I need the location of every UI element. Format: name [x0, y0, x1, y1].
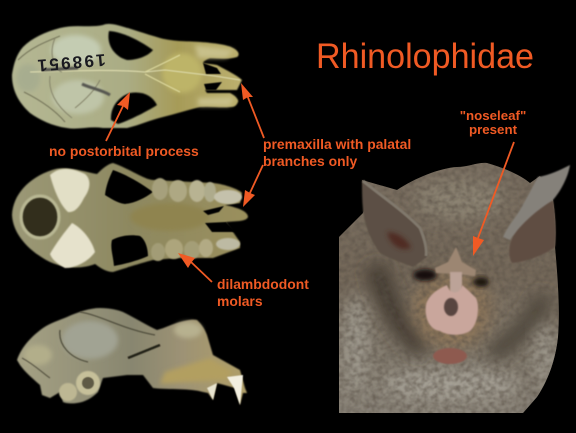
- label: noseleaf present: present: [469, 122, 518, 137]
- eye socket upper: [108, 31, 153, 60]
- arrow: to ventral premaxilla: [243, 165, 263, 207]
- eye shadows: [413, 269, 437, 281]
- rostrum: [160, 358, 234, 384]
- right ear: [509, 200, 556, 263]
- left ear: [362, 180, 428, 267]
- palate: [130, 203, 210, 231]
- lower teeth: [151, 238, 240, 261]
- premolar: [207, 383, 217, 400]
- upper teeth: [152, 178, 242, 204]
- dark ink marks: [42, 68, 110, 95]
- dark collar left: [375, 265, 425, 350]
- suture lines: [18, 36, 240, 122]
- arrow: to postorbital: [106, 92, 130, 141]
- skull: dorsal view: [12, 24, 242, 129]
- nasal gap: [203, 206, 236, 232]
- dark slit: [128, 345, 160, 358]
- forehead: [415, 180, 505, 220]
- specimen number: 198951: [37, 50, 106, 75]
- skull: ventral view: [12, 163, 248, 272]
- label: premaxilla: premaxilla with palatal: [263, 136, 411, 152]
- photo: bat face: [335, 160, 575, 415]
- label: noseleaf present: "noseleaf": [460, 108, 526, 123]
- title: Rhinolophidae: [316, 37, 534, 76]
- arrow: to noseleaf: [473, 142, 514, 256]
- noseleaf upper: [435, 247, 476, 276]
- tympanic bulla lower: [50, 223, 95, 268]
- arrow: to molars: [178, 253, 212, 282]
- orbit gap lower: [111, 235, 148, 266]
- dark collar right: [490, 295, 545, 355]
- label: no postorbital process: no postorbital process: [49, 143, 199, 159]
- eye socket lower: [111, 92, 157, 124]
- label: dilambdodont molars: dilambdodont: [217, 276, 309, 292]
- pale chest: [380, 369, 520, 401]
- fur texture: [339, 163, 558, 413]
- noseleaf horseshoe: [426, 285, 478, 335]
- arrow: to dorsal premaxilla: [241, 83, 264, 138]
- auditory bulla: [76, 371, 100, 395]
- label: premaxilla: branches only: [263, 153, 357, 169]
- canine: [227, 375, 243, 405]
- sutures: [22, 312, 155, 378]
- label: noseleaf present: [460, 108, 526, 137]
- label: premaxilla: [263, 136, 411, 169]
- rostrum highlight: [162, 53, 202, 93]
- label: dilambdodont molars: [217, 276, 309, 309]
- skull: lateral view: [17, 308, 247, 405]
- braincase: [62, 321, 118, 359]
- mouth: [433, 348, 467, 364]
- nasal notch: [203, 63, 222, 90]
- braincase highlights: [51, 35, 101, 65]
- muzzle fur: [412, 270, 492, 350]
- orbit gap upper: [105, 170, 153, 204]
- foramen magnum: [22, 197, 58, 237]
- tympanic bulla upper: [50, 169, 89, 212]
- label: dilambdodont molars: molars: [217, 293, 263, 309]
- nostrils: [444, 298, 458, 316]
